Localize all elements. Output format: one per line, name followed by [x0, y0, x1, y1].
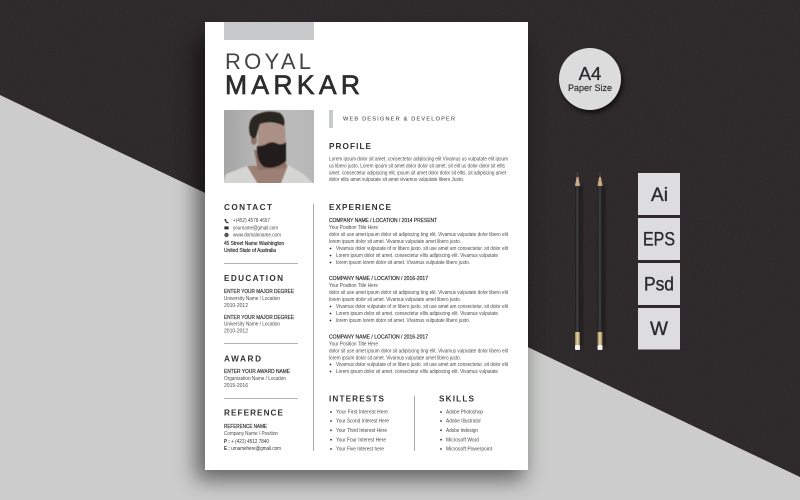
job entry 3: Lorem ipsum dolor sit amet. consectetur ellts adipiscing elit. Vivamus vulputate: [336, 369, 498, 375]
section: skills: Microsoft Word: [446, 437, 479, 443]
icon: left pencil: [575, 172, 583, 350]
file format tile: Psd: [638, 263, 680, 305]
section: contact: United State of Australia: [224, 248, 276, 254]
badge: A4 paper size: A4: [579, 63, 601, 84]
section: reference: Company Name / Position: [224, 431, 278, 437]
section: profile: dolor ellts amet vulputate sit amet vivamus vulputate libero Justo.: [329, 177, 464, 183]
job entry 2: dolor sit use amet ipsum dolor sit adipiscing ting elit. Vivamus vulputate dolor libero elit: [329, 290, 508, 296]
section: award: [224, 354, 290, 389]
section: reference: P : + (421) 4512 7840: [224, 439, 269, 445]
paper shadow: [196, 40, 524, 480]
badge: A4 paper size: [559, 48, 623, 113]
file format tile: EPS: EPS: [643, 230, 675, 250]
section: award: Organization Name / Location: [224, 376, 286, 382]
section: reference: [224, 408, 284, 452]
file format tile: Ai: Ai: [651, 185, 668, 206]
job entry 2: lorem ipsum lorem dolor sit amet. Vivamus vulputate libero justo.: [336, 318, 470, 324]
section: education: ENTER YOUR MAJOR DEGREE: [224, 289, 294, 295]
section: skills: [439, 395, 493, 452]
section: profile: Lorem ipsum dolor sit amet. consectetur adipiscing elit Vivamus us vulputate elit ipsum: [329, 156, 508, 162]
portrait photo: [222, 110, 316, 186]
job entry 2: Vivamus dolor vulputate of or libero justo. sit use amet am consectetur. sit dolor elit: [336, 304, 508, 310]
job entry 3: dolor sit use amet ipsum dolor sit adipiscing ting elit. Vivamus vulputate dolor libero elit: [329, 348, 508, 354]
section: experience: EXPERIENCE: [329, 203, 392, 212]
job entry 3: COMPANY NAME / LOCATION / 2016-2017: [329, 334, 428, 340]
panel: resume paper: [205, 22, 528, 470]
job entry 2: lorem ipsum dolor sit amet. Vivamus vulputate amet libero justo.: [329, 297, 461, 303]
job entry 2: Lorem ipsum dolor sit amet. consectetur ellts adipiscing elit. Vivamus vulputate: [336, 311, 498, 317]
job title: WEB DESIGNER & DEVELOPER: [343, 116, 455, 122]
name heading: ROYAL: [225, 49, 311, 74]
section: education: 2010-2012: [224, 303, 248, 309]
icon: globe: [224, 233, 229, 237]
section: interests: INTERESTS: [329, 395, 385, 404]
icon: mail: [224, 226, 229, 229]
job entry 1: lorem ipsum lorem dolor sit amet. Vivamus vulputate libero justo.: [336, 260, 470, 266]
job entry 3: [329, 334, 508, 375]
section: education: [224, 274, 294, 334]
title accent bar: [329, 110, 333, 128]
file format tile: Psd: Psd: [644, 275, 674, 296]
icon: phone: [224, 219, 229, 223]
section: contact: www.domainname.com: [233, 232, 281, 238]
job entry 3: lorem ipsum dolor sit amet. Vivamus vulputate amet libero justo.: [329, 355, 461, 361]
file format tile: W: [638, 308, 680, 350]
section: profile: us libero justo. Lorem ipsum sit amet dolor dolor sit amet. sit elit us dolor dolor sit ellts: [329, 164, 505, 170]
section: contact: yourname@gmail.com: [233, 225, 278, 231]
section: reference: REFERENCE NAME: [224, 424, 267, 430]
section: skills: SKILLS: [439, 395, 475, 404]
job entry 1: Lorem ipsum dolor sit amet. consectetur ellts adipiscing elit. Vivamus vulputate: [336, 253, 498, 259]
section: education: 2010-2012: [224, 328, 248, 334]
section: award: 2015-2016: [224, 383, 248, 389]
section: reference: E : urnamehere@gmail.com: [224, 446, 281, 452]
section: skills: Adobe Illustrator: [446, 419, 481, 425]
section: award: AWARD: [224, 354, 261, 364]
job entry 2: COMPANY NAME / LOCATION / 2016-2017: [329, 276, 428, 282]
section: award: ENTER YOUR AWARD NAME: [224, 369, 290, 375]
job entry 2: Your Position Title Here: [329, 283, 378, 289]
badge: A4 paper size: Paper Size: [568, 83, 612, 93]
section: interests: Your Four Interest Here: [336, 437, 386, 443]
name heading: [225, 49, 360, 100]
section: education: University Name / Location: [224, 322, 280, 328]
section: interests: [329, 395, 389, 452]
section: profile: [329, 142, 508, 183]
icon: right pencil: [598, 172, 606, 350]
section: contact: +(452) 4578 4657: [233, 218, 270, 224]
section: skills: Microsoft Powerpoint: [446, 446, 493, 452]
job entry 1: COMPANY NAME / LOCATION / 2014 PRESENT: [329, 218, 438, 224]
top gray tab: [224, 22, 314, 40]
section: interests: Your Scond Interest Here: [336, 419, 389, 425]
job entry 3: Your Position Title Here: [329, 342, 378, 348]
section: skills: Adobe Indesign: [446, 428, 478, 434]
section: education: ENTER YOUR MAJOR DEGREE: [224, 315, 294, 321]
job entry 1: lorem ipsum dolor sit amet. Vivamus vulputate amet libero justo.: [329, 239, 461, 245]
section: education: University Name / Location: [224, 296, 280, 302]
file format tile: Ai: [638, 173, 680, 215]
file format tile: W: W: [650, 319, 668, 340]
job entry 1: [329, 218, 508, 266]
section: experience: [329, 203, 508, 375]
section: interests: Your Third Interest Here: [336, 428, 387, 434]
job entry 1: dolor sit use amet ipsum dolor sit adipiscing ting elit. Vivamus vulputate dolor libero elit: [329, 232, 508, 238]
job entry 1: Vivamus dolor vulputate of or libero justo. sit use amet am consectetur. sit dolor elit: [336, 246, 508, 252]
section: contact: 45 Street Name Washington: [224, 241, 284, 247]
section: profile: PROFILE: [329, 142, 372, 151]
section: interests: Your First Interest Here: [336, 410, 388, 416]
file format tile: EPS: [638, 218, 680, 260]
job entry 3: Vivamus dolor vulputate of or libero justo. sit use amet am consectetur. sit dolor elit: [336, 362, 508, 368]
section: profile: amet. consectetur adipiscing elit. ipsum sit amet dolor dolor sit ellts. sit adipiscing amet: [329, 170, 506, 176]
section: contact: CONTACT: [224, 203, 272, 212]
job entry 2: [329, 276, 508, 324]
section: interests: Your Five Interest here: [336, 446, 384, 452]
name heading: MARKAR: [225, 70, 360, 100]
section: reference: REFERENCE: [224, 408, 284, 418]
section: skills: Adobe Photoshop: [446, 410, 483, 416]
section: contact: [224, 203, 284, 254]
section: education: EDUCATION: [224, 274, 283, 283]
job entry 1: Your Position Title Here: [329, 225, 378, 231]
